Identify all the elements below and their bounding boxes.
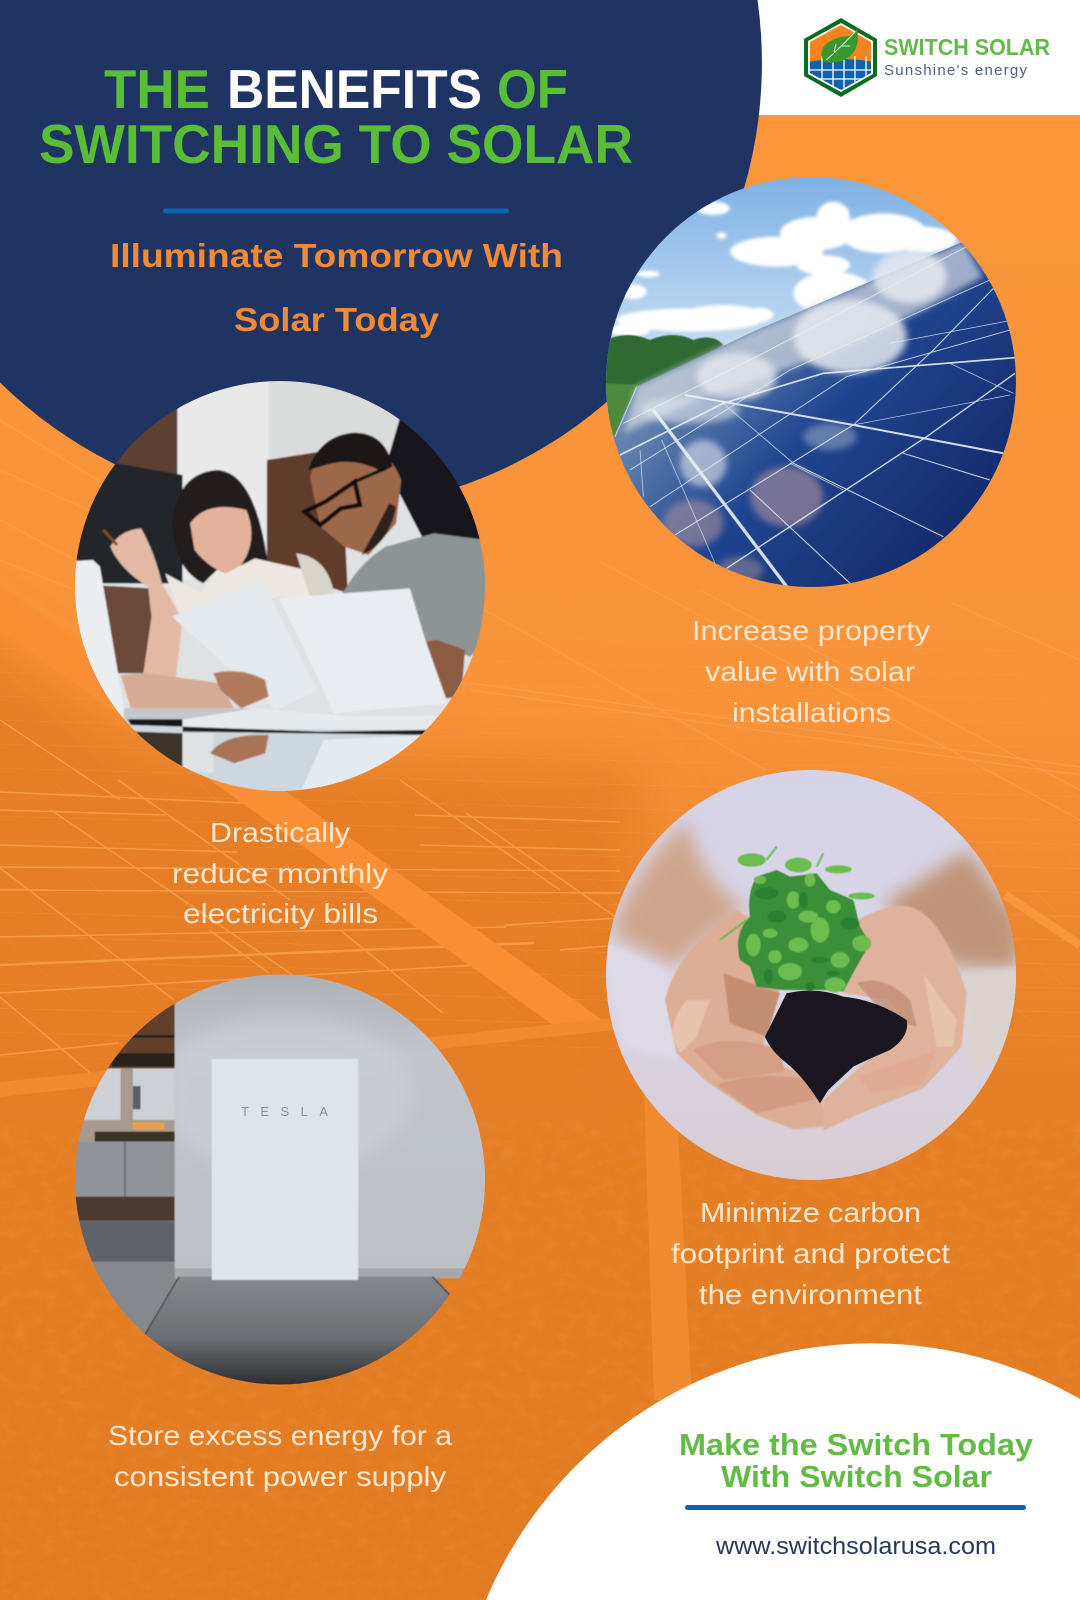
trees and grass xyxy=(606,334,724,436)
room interior xyxy=(62,1000,175,1395)
glossy top edge xyxy=(623,242,983,433)
call to action heading: With Switch Solar xyxy=(721,1460,992,1494)
photo: hands holding seedling xyxy=(606,770,1016,1180)
papers xyxy=(172,580,317,711)
woman xyxy=(103,470,334,708)
photo: couple reviewing bills xyxy=(62,380,496,803)
clouds xyxy=(610,202,957,337)
text: carbon footprint benefit xyxy=(671,1197,950,1310)
photo: solar panels under sky xyxy=(606,177,1016,587)
icon: solar hexagon with leaf xyxy=(804,18,877,97)
title: OF xyxy=(497,59,568,120)
subtitle: Illuminate Tomorrow With xyxy=(110,238,563,275)
photo: Tesla home battery xyxy=(75,974,485,1384)
website url: www.switchsolarusa.com xyxy=(715,1533,996,1560)
call to action heading xyxy=(679,1428,1033,1494)
text: property value benefit: installations xyxy=(732,697,891,728)
text: electricity bills benefit: reduce monthly xyxy=(172,858,388,889)
title: BENEFITS xyxy=(227,59,482,120)
text: carbon footprint benefit: the environment xyxy=(699,1279,922,1310)
text: property value benefit: value with solar xyxy=(705,656,915,687)
panel: navy header circle xyxy=(0,0,762,511)
text: carbon footprint benefit: footprint and protect xyxy=(671,1238,950,1269)
cupped hands xyxy=(665,906,967,1131)
panel: white logo corner xyxy=(740,0,1080,115)
battery unit xyxy=(212,1059,358,1280)
text: property value benefit: Increase property xyxy=(692,615,930,646)
blurred arms xyxy=(610,820,1020,970)
title: THE xyxy=(104,59,210,120)
subtitle xyxy=(110,238,563,339)
text: energy storage benefit: Store excess energy for a xyxy=(108,1420,452,1451)
reflections xyxy=(640,250,947,487)
soil xyxy=(765,991,907,1103)
text: electricity bills benefit xyxy=(172,817,388,929)
title: SWITCHING TO SOLAR xyxy=(39,114,633,175)
man xyxy=(305,433,489,700)
text: property value benefit xyxy=(692,615,930,728)
panel surface xyxy=(613,242,1040,600)
text: electricity bills benefit: Drastically xyxy=(210,817,350,848)
panel grid lines xyxy=(615,247,1015,587)
title xyxy=(39,59,633,175)
text: electricity bills benefit: electricity bills xyxy=(183,898,378,929)
subtitle: Solar Today xyxy=(234,302,439,339)
battery brand: TESLA xyxy=(241,1104,328,1119)
panel: call to action xyxy=(486,1343,1080,1600)
laptop xyxy=(75,558,124,718)
text: energy storage benefit xyxy=(108,1420,452,1492)
floor xyxy=(175,1268,502,1278)
text: carbon footprint benefit: Minimize carbon xyxy=(700,1197,921,1228)
table and reflection xyxy=(126,720,410,791)
call to action heading: Make the Switch Today xyxy=(679,1428,1033,1462)
brand name: SWITCH SOLAR xyxy=(884,34,1050,60)
header text block xyxy=(39,59,633,339)
logo: Switch Solar xyxy=(804,18,1050,97)
tagline: Sunshine's energy xyxy=(884,62,1028,79)
text: energy storage benefit: consistent power supply xyxy=(114,1461,446,1492)
seedling xyxy=(720,847,875,992)
